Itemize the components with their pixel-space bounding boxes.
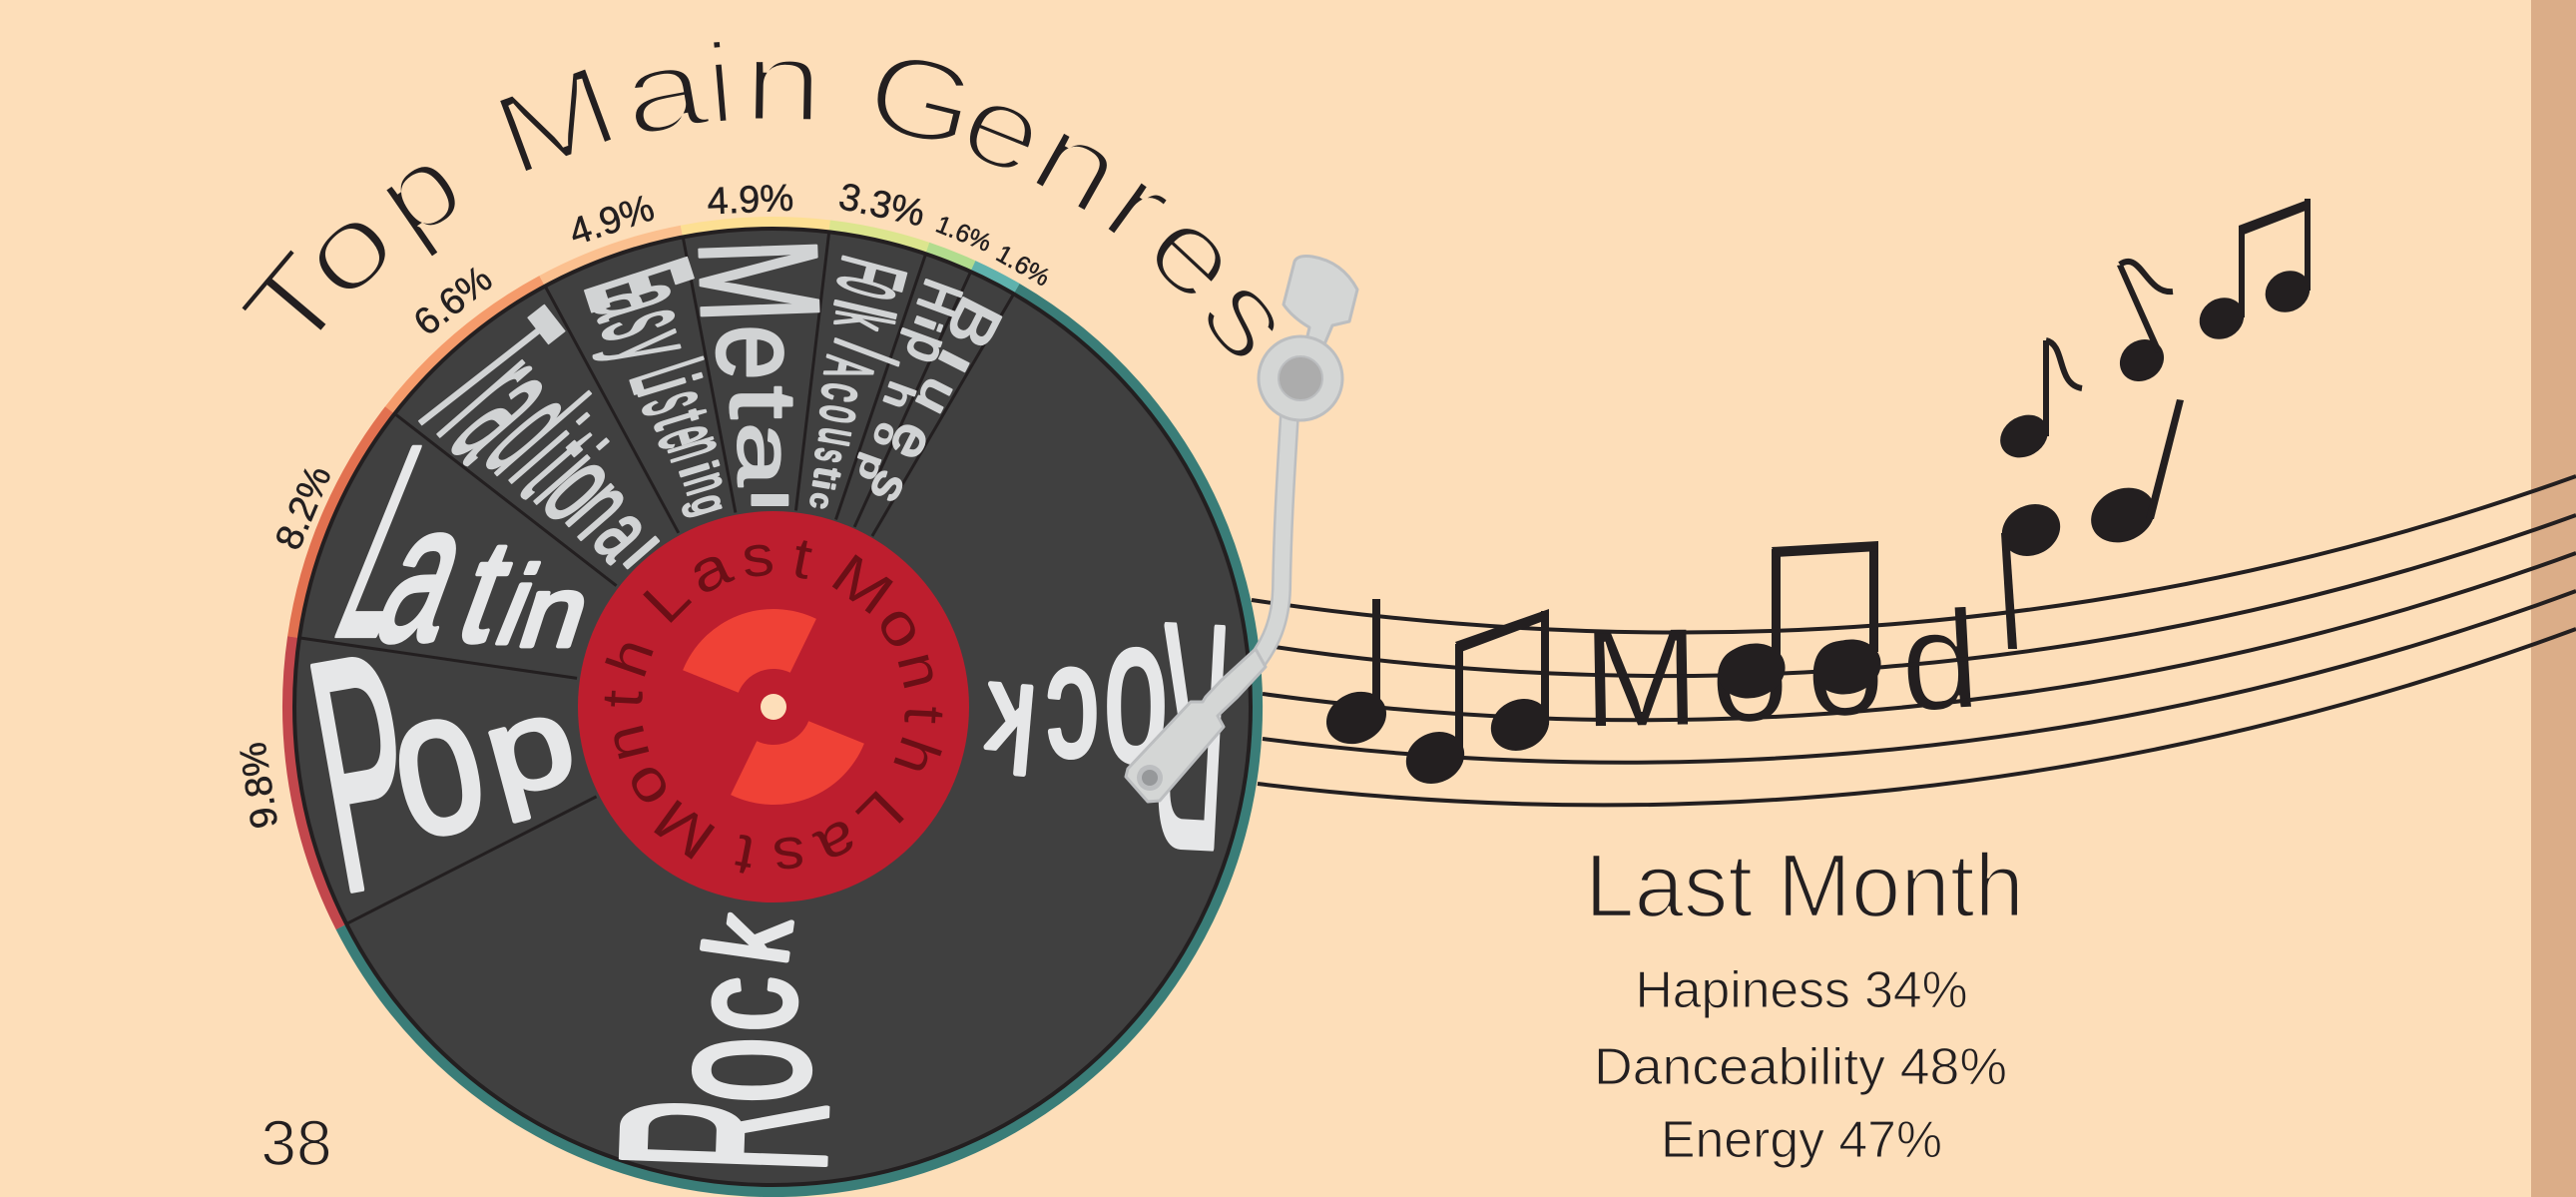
genre label: Easy Listening: E bbox=[554, 245, 726, 323]
circular label text: Last Month Last Month: M bbox=[642, 786, 727, 873]
genre label: Folk/Acoustic: l bbox=[816, 293, 911, 325]
spindle hole bbox=[761, 694, 786, 720]
genre label: Traditional: i bbox=[511, 421, 628, 524]
title: Top Main Genres: p bbox=[352, 119, 485, 266]
genre label: Traditional: a bbox=[415, 324, 604, 494]
genre label: Traditional: T bbox=[369, 272, 607, 469]
genre label: Folk/Acoustic bbox=[803, 248, 932, 511]
genre label: Metal: e bbox=[692, 324, 827, 380]
circular label text: Last Month Last Month bbox=[589, 522, 958, 892]
genre label: Rock (upper right): o bbox=[1104, 608, 1168, 836]
pivot bbox=[1259, 336, 1342, 420]
genre label: Rock (lower): R bbox=[558, 1093, 889, 1176]
genre label: Rock (upper right) bbox=[980, 556, 1237, 916]
circular label text: Last Month Last Month: n bbox=[885, 645, 956, 695]
title: Top Main Genres: s bbox=[1177, 249, 1321, 385]
genre label: Pop: p bbox=[469, 668, 589, 825]
circular label text: Last Month Last Month: a bbox=[806, 807, 869, 883]
genre label: Traditional: a bbox=[576, 488, 673, 577]
genre label: Rock (upper right): k bbox=[980, 658, 1040, 796]
circular label text: Last Month Last Month: L bbox=[844, 778, 916, 850]
genre label: Easy Listening: s bbox=[622, 377, 734, 425]
genre label: Folk/Acoustic: c bbox=[808, 378, 880, 407]
title: Top Main Genres: G bbox=[854, 24, 989, 174]
genre label: Latin: L bbox=[305, 390, 479, 694]
genre label: Hip hop bbox=[851, 273, 974, 485]
circular label text: Last Month Last Month: t bbox=[730, 823, 760, 890]
record disc with genre segments bbox=[94, 28, 1451, 1197]
genre label: Traditional: o bbox=[519, 427, 647, 544]
heading: Mood on the staff: d bbox=[1896, 580, 1982, 741]
genre label: Folk/Acoustic: u bbox=[806, 424, 869, 451]
genre label: Blues: l bbox=[929, 341, 978, 379]
orange label sectors bbox=[683, 609, 864, 805]
heading: Last Month: Last Month bbox=[1585, 837, 2024, 936]
genre label: Latin: a bbox=[354, 463, 498, 682]
genre label: Rock (lower): k bbox=[683, 907, 817, 970]
genre label: Rock (lower): c bbox=[659, 976, 826, 1032]
stats list: Energy 47% bbox=[1661, 1111, 1942, 1169]
segment dividers bbox=[299, 232, 1014, 923]
circular label text: Last Month Last Month: t bbox=[589, 688, 655, 710]
heading: Mood on the staff bbox=[1581, 580, 1982, 757]
percentage labels: 6.6% bbox=[406, 258, 500, 344]
percentage labels: 8.2% bbox=[267, 460, 340, 556]
percentage labels: 4.9% bbox=[707, 178, 794, 223]
vinyl body bbox=[294, 229, 1251, 1185]
genre label: Easy Listening: n bbox=[651, 425, 747, 469]
genre label: Folk/Acoustic: t bbox=[805, 464, 849, 482]
genre label: Hip hop: o bbox=[866, 418, 905, 450]
genre label: Traditional: i bbox=[484, 395, 609, 505]
genre label: Folk/Acoustic: / bbox=[814, 334, 915, 369]
circular label text: Last Month Last Month: n bbox=[591, 719, 662, 769]
genre label: Easy Listening: s bbox=[575, 292, 723, 352]
percentage labels: 9.8% bbox=[233, 740, 286, 832]
genre label: Metal: t bbox=[711, 385, 816, 419]
genre label: Hip hop: H bbox=[905, 273, 974, 323]
genre label: Metal: l bbox=[741, 489, 797, 511]
genre label: Traditional: r bbox=[401, 305, 591, 474]
genre label: Easy Listening: t bbox=[637, 400, 725, 437]
stats list bbox=[1594, 961, 2007, 1169]
title: Top Main Genres: r bbox=[1082, 139, 1197, 272]
genre label: Easy Listening: e bbox=[641, 413, 740, 457]
genre label: Easy Listening: i bbox=[618, 365, 717, 405]
genre label: Folk/Acoustic: i bbox=[806, 477, 840, 492]
stats list: Hapiness 34% bbox=[1635, 961, 1968, 1019]
genre label: Hip hop: i bbox=[906, 310, 950, 337]
genre label: Blues bbox=[859, 287, 1015, 513]
genre label: Traditional: l bbox=[612, 528, 669, 579]
circular label text: Last Month Last Month: t bbox=[787, 524, 817, 591]
genre label: Folk/Acoustic: o bbox=[815, 267, 932, 312]
genre label: Blues: s bbox=[859, 463, 921, 513]
genre label: Hip hop: p bbox=[893, 325, 961, 372]
counterweight bbox=[1284, 257, 1357, 344]
genre label: Easy Listening: g bbox=[681, 487, 740, 521]
title: Top Main Genres: M bbox=[477, 39, 634, 201]
title: Top Main Genres bbox=[218, 16, 1321, 385]
circular label text: Last Month Last Month: h bbox=[594, 630, 667, 685]
title: Top Main Genres: n bbox=[743, 16, 824, 147]
coloured outer ring bbox=[94, 28, 1451, 1197]
genre label: Metal: M bbox=[663, 236, 855, 325]
genre label: Blues: B bbox=[932, 287, 1015, 359]
genre label: Folk/Acoustic: o bbox=[806, 400, 876, 429]
record centre label bbox=[578, 511, 969, 902]
genre label: Latin bbox=[305, 390, 605, 694]
circular label text: Last Month Last Month: L bbox=[631, 564, 703, 636]
genre label: Folk/Acoustic: k bbox=[818, 306, 909, 336]
genre label: Easy Listening: n bbox=[671, 464, 746, 501]
genre label: Rock (lower): o bbox=[619, 1037, 852, 1103]
tonearm bbox=[1126, 257, 1357, 802]
circular label text: Last Month Last Month: a bbox=[678, 531, 741, 607]
genre label: Rock (upper right): R bbox=[1146, 556, 1237, 916]
circular label text: Last Month Last Month: t bbox=[892, 704, 958, 726]
percentage labels: 1.6% bbox=[932, 211, 995, 258]
genre label: Rock (lower) bbox=[558, 907, 889, 1176]
genre label: Traditional: n bbox=[546, 455, 658, 558]
circular label text: Last Month Last Month: s bbox=[771, 824, 808, 892]
genre label: Easy Listening: y bbox=[592, 316, 720, 373]
genre label: Traditional: d bbox=[454, 356, 616, 502]
title: Top Main Genres: e bbox=[1122, 180, 1269, 327]
title: Top Main Genres: T bbox=[218, 228, 372, 378]
genre label: Latin: n bbox=[507, 556, 605, 667]
title: Top Main Genres: a bbox=[612, 21, 717, 162]
music staff lines bbox=[1252, 476, 2576, 805]
genre label: Easy Listening bbox=[554, 245, 747, 521]
genre label: Metal bbox=[663, 236, 855, 511]
heading: Mood on the staff: o bbox=[1706, 592, 1792, 753]
title: Top Main Genres: n bbox=[1012, 88, 1145, 240]
genre label: Folk/Acoustic: F bbox=[818, 248, 925, 298]
genre label: Hip hop: p bbox=[851, 450, 891, 485]
genre label: Pop bbox=[289, 585, 589, 962]
title: Top Main Genres: o bbox=[272, 175, 420, 324]
genre label: Folk/Acoustic: c bbox=[803, 490, 838, 511]
genre label: Rock (upper right): c bbox=[1047, 637, 1099, 816]
circular label text: Last Month Last Month: s bbox=[739, 522, 776, 590]
genre label: Hip hop: h bbox=[875, 376, 923, 414]
heading: Mood on the staff: M bbox=[1581, 598, 1701, 757]
genre label: Pop: P bbox=[289, 585, 438, 962]
percentage labels: 3.3% bbox=[835, 176, 928, 236]
percentage labels: 4.9% bbox=[564, 187, 660, 254]
genre label: Easy Listening: i bbox=[667, 455, 728, 483]
genre label: Latin: i bbox=[481, 545, 553, 667]
genre label: Pop: o bbox=[370, 640, 502, 883]
circular label text: Last Month Last Month: o bbox=[864, 593, 940, 660]
genre label: Blues: e bbox=[877, 413, 947, 471]
genre label: Traditional bbox=[369, 272, 673, 579]
stats list: Danceability 48% bbox=[1594, 1038, 2007, 1096]
percentage labels bbox=[233, 176, 1055, 832]
genre label: Easy Listening: a bbox=[565, 265, 722, 332]
genre label: Traditional: t bbox=[494, 407, 621, 519]
headshell bbox=[1126, 649, 1266, 802]
genre label: Latin: t bbox=[440, 511, 532, 672]
genre label: Easy Listening: L bbox=[607, 347, 728, 403]
percentage labels: 1.6% bbox=[991, 240, 1055, 293]
genre label: Folk/Acoustic: s bbox=[805, 445, 857, 466]
title: Top Main Genres: i bbox=[703, 19, 739, 149]
heading: Mood on the staff: o bbox=[1802, 586, 1887, 747]
circular label text: Last Month Last Month: h bbox=[880, 729, 953, 784]
genre label: Blues: u bbox=[905, 369, 970, 424]
circular label text: Last Month Last Month: M bbox=[820, 541, 905, 628]
genre label: Folk/Acoustic: A bbox=[809, 351, 888, 384]
genre label: Metal: a bbox=[722, 422, 809, 486]
title: Top Main Genres: e bbox=[945, 54, 1064, 202]
circular label text: Last Month Last Month: o bbox=[607, 754, 683, 821]
page number: 38 bbox=[260, 1107, 332, 1179]
music notes bbox=[1317, 199, 2318, 793]
